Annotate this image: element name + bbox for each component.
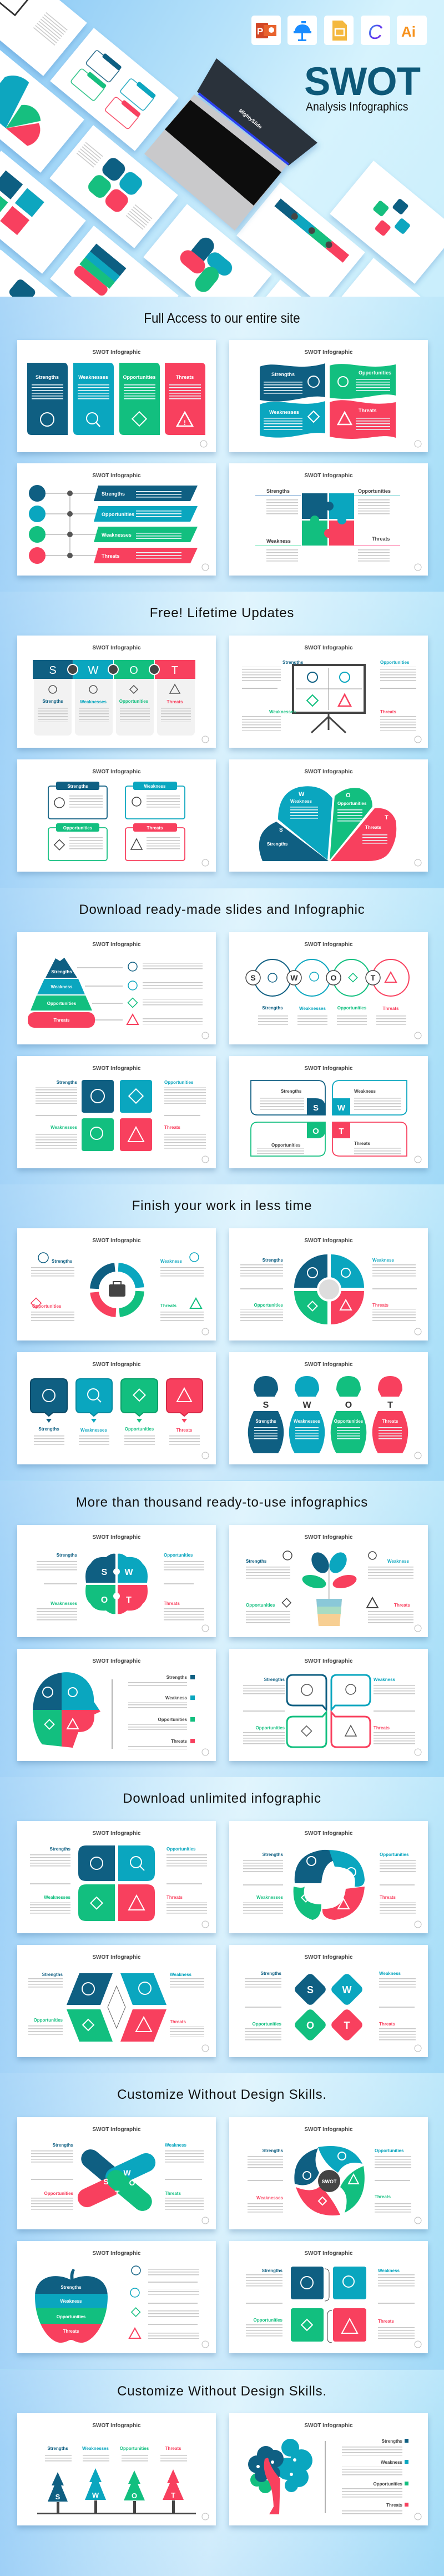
- ================= SECTION 5 =================: [0, 1481, 444, 1777]
- card 05: ribbon: Opportunities: [119, 699, 149, 704]
- card 16: vases: SWOT Infographic: [304, 1362, 353, 1368]
- card 27: apple: Strengths: [60, 2285, 82, 2290]
- card 09: pyramid: Threats: [54, 1018, 70, 1023]
- hero title: SWOT: [304, 60, 420, 104]
- card 02: wavy quadrants: SWOT Infographic: [304, 349, 353, 356]
- card 15: speech bubbles: [17, 1352, 216, 1464]
- card 08: fan: Strengths: [267, 842, 288, 847]
- card 08: fan: S: [279, 827, 283, 833]
- card 16: vases: Opportunities: [334, 1419, 364, 1424]
- card 23: hexagon: [17, 1945, 216, 2057]
- hero slide: easel: [0, 0, 87, 76]
- card 01: vertical panels: Opportunities: [123, 374, 155, 380]
- card 18: plant: Strengths: [246, 1559, 267, 1564]
- card 24: diamonds: O: [306, 2020, 314, 2031]
- card 07: outlined boxes: Opportunities: [63, 826, 93, 831]
- card 27: apple: Opportunities: [57, 2314, 86, 2319]
- card 17: brain puzzle: T: [126, 1595, 132, 1605]
- card 02: wavy quadrants: Threats: [359, 408, 377, 413]
- card 08: fan: Weakness: [290, 799, 312, 804]
- hero subtitle: Analysis Infographics: [306, 101, 408, 113]
- card 29: trees: Strengths: [47, 2446, 68, 2451]
- card 14: pie: Threats: [372, 1303, 389, 1308]
- card 20: outline bubbles: Opportunities: [256, 1725, 285, 1730]
- card 30: tree: Weakness: [381, 2460, 403, 2465]
- card 29: trees: O: [132, 2492, 137, 2500]
- card 09: pyramid: SWOT Infographic: [92, 942, 141, 948]
- card 25: knot: SWOT Infographic: [92, 2127, 141, 2133]
- card 25: knot: S: [103, 2177, 109, 2186]
- card 10: rings: W: [290, 973, 298, 982]
- card 04: puzzle: Opportunities: [358, 488, 391, 494]
- card 23: hexagon: Threats: [170, 2019, 186, 2024]
- card 11: squares: SWOT Infographic: [92, 1066, 141, 1072]
- card 01: vertical panels: !: [184, 419, 186, 427]
- card 05: ribbon: SWOT Infographic: [92, 645, 141, 651]
- card 25: knot: O: [129, 2178, 135, 2187]
- ================= SECTION 1 =================: [0, 297, 444, 593]
- card 20: outline bubbles: [229, 1649, 428, 1761]
- card 29: trees: Opportunities: [120, 2446, 149, 2451]
- card 10: rings: S: [250, 973, 256, 982]
- card 14: pie: Opportunities: [254, 1303, 284, 1308]
- card 09: pyramid: Opportunities: [47, 1001, 77, 1006]
- card 21: rounded squares: Opportunities: [167, 1847, 196, 1852]
- icon: powerpoint: P: [257, 26, 263, 37]
- card 20: outline bubbles: Threats: [374, 1725, 390, 1730]
- card 05: ribbon: Weaknesses: [80, 699, 107, 704]
- card 02: wavy quadrants: Opportunities: [359, 370, 391, 376]
- card 25: knot: Threats: [165, 2191, 181, 2196]
- card 28: framed squares: Threats: [378, 2319, 394, 2324]
- card 05: ribbon: T: [171, 664, 178, 677]
- card 24: diamonds: Opportunities: [253, 2022, 282, 2027]
- card 07: outlined boxes: Weakness: [144, 784, 166, 789]
- card 04: puzzle: [229, 463, 428, 576]
- card 19: head: Threats: [171, 1739, 188, 1744]
- section title: thousand infographics: More than thousand ready-to-use infographics: [76, 1495, 368, 1510]
- card 06: easel: Strengths: [282, 660, 304, 665]
- card 12: letter boxes: SWOT Infographic: [304, 1066, 353, 1072]
- card 07: outlined boxes: Threats: [147, 826, 163, 831]
- card 29: trees: S: [56, 2493, 60, 2501]
- card 14: pie: [229, 1228, 428, 1340]
- hero slide: W petals: [0, 49, 84, 173]
- card 23: hexagon: SWOT Infographic: [92, 1954, 141, 1960]
- ================= SECTION 7 =================: [0, 2073, 444, 2369]
- card 15: speech bubbles: Opportunities: [125, 1427, 154, 1432]
- card 06: easel: Threats: [380, 709, 396, 714]
- card 19: head: SWOT Infographic: [92, 1658, 141, 1664]
- hero slide: diamond quads: [0, 151, 86, 274]
- card 25: knot: Strengths: [53, 2143, 74, 2148]
- card 07: outlined boxes: [17, 759, 216, 872]
- card 27: apple: SWOT Infographic: [92, 2250, 141, 2257]
- hero slide: left bottom: [0, 249, 85, 373]
- hero banner: [0, 0, 444, 297]
- card 01: vertical panels: SWOT Infographic: [92, 349, 141, 356]
- ================= SECTION 8 =================: [0, 2370, 444, 2576]
- card 11: squares: [17, 1056, 216, 1168]
- card 25: knot: W: [123, 2168, 131, 2177]
- card 24: diamonds: T: [344, 2020, 350, 2031]
- card 24: diamonds: W: [342, 1984, 352, 1995]
- card 26: swirl swot: SWOT: [322, 2179, 337, 2184]
- card 10: rings: Strengths: [262, 1006, 283, 1011]
- section title: customize: Customize Without Design Skills.: [117, 2087, 327, 2102]
- card 12: letter boxes: W: [337, 1103, 346, 1113]
- card 16: vases: T: [387, 1400, 393, 1410]
- card 25: knot: [17, 2117, 216, 2229]
- card 08: fan: T: [385, 814, 389, 821]
- card 16: vases: S: [263, 1400, 269, 1410]
- card 04: puzzle: Strengths: [266, 488, 290, 494]
- hero slide: knot: [143, 204, 272, 327]
- ================= SECTION 3 =================: [0, 888, 444, 1184]
- card 24: diamonds: Weakness: [379, 1971, 401, 1976]
- card 06: easel: Weaknesses: [269, 709, 296, 714]
- icon: keynote: [287, 16, 317, 45]
- card 12: letter boxes: Strengths: [281, 1089, 302, 1094]
- card 10: rings: Threats: [383, 1006, 399, 1011]
- section title: finish work: Finish your work in less time: [132, 1198, 312, 1213]
- card 24: diamonds: [229, 1945, 428, 2057]
- card 18: plant: Threats: [394, 1603, 410, 1608]
- card 13: donut: Opportunities: [32, 1304, 62, 1309]
- card 03: timeline bars: [17, 463, 216, 576]
- card 12: letter boxes: [229, 1056, 428, 1168]
- card 21: rounded squares: Strengths: [50, 1847, 71, 1852]
- icon: google slides: [324, 16, 354, 45]
- card 10: rings: T: [371, 973, 376, 982]
- hero slide: bottom right: [330, 258, 444, 381]
- card 30: tree: Opportunities: [374, 2482, 403, 2487]
- card 03: timeline bars: Opportunities: [102, 512, 134, 517]
- card 16: vases: Weaknesses: [294, 1419, 320, 1424]
- card 25: knot: Opportunities: [44, 2191, 74, 2196]
- card 16: vases: Threats: [382, 1419, 398, 1424]
- card 17: brain puzzle: Weaknesses: [51, 1601, 78, 1606]
- card 05: ribbon: Strengths: [42, 699, 63, 704]
- section title: lifetime updates: Free! Lifetime Updates: [150, 606, 294, 621]
- card 21: rounded squares: Weaknesses: [44, 1895, 71, 1900]
- card 06: easel: Opportunities: [380, 660, 410, 665]
- card 11: squares: Strengths: [57, 1080, 78, 1085]
- card 10: rings: O: [331, 973, 337, 982]
- card 14: pie: SWOT Infographic: [304, 1238, 353, 1244]
- card 25: knot: Weakness: [165, 2143, 187, 2148]
- card 12: letter boxes: O: [312, 1127, 319, 1136]
- card 30: tree: Threats: [386, 2503, 403, 2508]
- card 12: letter boxes: T: [339, 1127, 344, 1136]
- card 19: head: [17, 1649, 216, 1761]
- card 20: outline bubbles: SWOT Infographic: [304, 1658, 353, 1664]
- card 24: diamonds: Strengths: [261, 1971, 282, 1976]
- app icons: [251, 16, 427, 45]
- card 17: brain puzzle: Opportunities: [164, 1553, 193, 1558]
- card 13: donut: SWOT Infographic: [92, 1238, 141, 1244]
- ================= SECTION 2 =================: [0, 592, 444, 888]
- card 13: donut: Weakness: [160, 1259, 183, 1264]
- card 08: fan: [229, 759, 428, 872]
- card 29: trees: [17, 2413, 216, 2525]
- card 24: diamonds: SWOT Infographic: [304, 1954, 353, 1960]
- card 17: brain puzzle: S: [102, 1568, 108, 1577]
- card 04: puzzle: Threats: [372, 536, 390, 542]
- card 07: outlined boxes: Strengths: [67, 784, 88, 789]
- card 09: pyramid: Weakness: [51, 984, 73, 989]
- card 07: outlined boxes: SWOT Infographic: [92, 769, 141, 775]
- ================= SECTION 6 =================: [0, 1777, 444, 2073]
- card 22: swirl: Opportunities: [380, 1852, 409, 1857]
- card 04: puzzle: SWOT Infographic: [304, 473, 353, 479]
- card 10: rings: Weaknesses: [299, 1006, 326, 1011]
- card 28: framed squares: Strengths: [262, 2268, 283, 2273]
- icon: illustrator: [397, 16, 427, 45]
- card 15: speech bubbles: SWOT Infographic: [92, 1362, 141, 1368]
- card 01: vertical panels: Weaknesses: [78, 374, 108, 380]
- hero slide: diamonds: [330, 161, 444, 284]
- card 16: vases: W: [302, 1400, 311, 1410]
- card 06: easel: [229, 636, 428, 748]
- card 22: swirl: Threats: [380, 1895, 396, 1900]
- card 05: ribbon: O: [129, 664, 138, 677]
- card 28: framed squares: Weakness: [378, 2268, 400, 2273]
- card 05: ribbon: Threats: [167, 699, 183, 704]
- card 20: outline bubbles: Weakness: [374, 1677, 396, 1682]
- card 08: fan: Threats: [365, 825, 381, 830]
- card 17: brain puzzle: Strengths: [57, 1553, 78, 1558]
- card 14: pie: Weakness: [372, 1258, 395, 1263]
- card 14: pie: Strengths: [263, 1258, 284, 1263]
- card 13: donut: Threats: [160, 1303, 176, 1308]
- card 12: letter boxes: Weakness: [354, 1089, 376, 1094]
- card 19: head: Opportunities: [158, 1717, 188, 1722]
- card 11: squares: Opportunities: [164, 1080, 194, 1085]
- laptop: [144, 58, 317, 231]
- card 21: rounded squares: [17, 1821, 216, 1933]
- card 02: wavy quadrants: Weaknesses: [269, 409, 299, 415]
- card 18: plant: Opportunities: [246, 1603, 275, 1608]
- card 26: swirl swot: Threats: [375, 2194, 391, 2199]
- hero slide: outlined boxes: [50, 28, 179, 151]
- card 30: tree: Strengths: [382, 2439, 403, 2444]
- card 08: fan: SWOT Infographic: [304, 769, 353, 775]
- card 03: timeline bars: Weaknesses: [102, 532, 132, 538]
- card 02: wavy quadrants: Strengths: [271, 372, 295, 377]
- card 29: trees: W: [92, 2491, 99, 2499]
- card 20: outline bubbles: Strengths: [264, 1677, 285, 1682]
- card 18: plant: [229, 1525, 428, 1637]
- card 22: swirl: SWOT Infographic: [304, 1830, 353, 1837]
- card 28: framed squares: [229, 2241, 428, 2353]
- card 08: fan: W: [299, 791, 305, 798]
- card 23: hexagon: Opportunities: [34, 2018, 63, 2023]
- card 26: swirl swot: Opportunities: [375, 2148, 404, 2153]
- card 12: letter boxes: Opportunities: [271, 1143, 301, 1148]
- card 05: ribbon: [17, 636, 216, 748]
- card 09: pyramid: [17, 932, 216, 1044]
- card 12: letter boxes: Threats: [354, 1141, 370, 1146]
- card 03: timeline bars: Threats: [102, 553, 120, 559]
- card 29: trees: SWOT Infographic: [92, 2423, 141, 2429]
- card 15: speech bubbles: Weaknesses: [80, 1428, 107, 1433]
- card 25: knot: T: [115, 2189, 120, 2198]
- card 03: timeline bars: Strengths: [102, 491, 125, 497]
- card 11: squares: Weaknesses: [51, 1125, 78, 1130]
- card 30: tree: SWOT Infographic: [304, 2423, 353, 2429]
- card 22: swirl: [229, 1821, 428, 1933]
- card 17: brain puzzle: [17, 1525, 216, 1637]
- card 05: ribbon: S: [49, 664, 57, 677]
- hero slide: apple: [50, 226, 179, 349]
- card 30: tree: [229, 2413, 428, 2525]
- section title: unlimited: Download unlimited infographic: [123, 1791, 321, 1806]
- card 28: framed squares: SWOT Infographic: [304, 2250, 353, 2257]
- card 26: swirl swot: Weaknesses: [256, 2195, 284, 2200]
- card 23: hexagon: Strengths: [42, 1972, 63, 1977]
- card 19: head: Strengths: [167, 1675, 188, 1680]
- card 28: framed squares: Opportunities: [254, 2318, 283, 2323]
- card 22: swirl: Strengths: [263, 1852, 284, 1857]
- card 26: swirl swot: SWOT Infographic: [304, 2127, 353, 2133]
- card 29: trees: Threats: [165, 2446, 181, 2451]
- card 17: brain puzzle: SWOT Infographic: [92, 1534, 141, 1540]
- card 11: squares: Threats: [164, 1125, 180, 1130]
- card 01: vertical panels: Strengths: [36, 374, 59, 380]
- card 21: rounded squares: SWOT Infographic: [92, 1830, 141, 1837]
- card 23: hexagon: Weakness: [170, 1972, 192, 1977]
- section title: full access: Full Access to our entire site: [144, 311, 300, 326]
- card 16: vases: [229, 1352, 428, 1464]
- card 13: donut: Strengths: [52, 1259, 73, 1264]
- card 04: puzzle: Weakness: [266, 538, 291, 544]
- card 24: diamonds: Threats: [379, 2022, 395, 2027]
- card 01: vertical panels: Threats: [176, 374, 194, 380]
- icon: canva: [361, 16, 390, 45]
- card 29: trees: T: [171, 2491, 175, 2499]
- card 03: timeline bars: SWOT Infographic: [92, 473, 141, 479]
- card 17: brain puzzle: Threats: [164, 1601, 180, 1606]
- card 16: vases: O: [345, 1400, 352, 1410]
- card 08: fan: O: [346, 792, 351, 799]
- card 10: rings: SWOT Infographic: [304, 942, 353, 948]
- card 27: apple: [17, 2241, 216, 2353]
- card 26: swirl swot: Strengths: [263, 2148, 284, 2153]
- card 22: swirl: Weaknesses: [256, 1895, 284, 1900]
- card 29: trees: Weaknesses: [82, 2446, 109, 2451]
- card 18: plant: SWOT Infographic: [304, 1534, 353, 1540]
- card 24: diamonds: S: [307, 1984, 314, 1995]
- section title: customize 2: Customize Without Design Skills.: [117, 2384, 327, 2399]
- card 10: rings: [229, 932, 428, 1044]
- card 13: donut: [17, 1228, 216, 1340]
- hero slide: ribbon: [236, 182, 365, 306]
- card 19: head: Weakness: [165, 1695, 188, 1700]
- card 01: vertical panels: [17, 340, 216, 452]
- icon: powerpoint: [251, 16, 281, 45]
- card 16: vases: Strengths: [255, 1419, 276, 1424]
- card 17: brain puzzle: W: [124, 1568, 133, 1577]
- card 18: plant: Weakness: [387, 1559, 410, 1564]
- card 05: ribbon: W: [88, 664, 99, 677]
- laptop: MightySlide: [238, 108, 263, 130]
- card 10: rings: Opportunities: [337, 1006, 367, 1011]
- card 08: fan: Opportunities: [337, 801, 367, 806]
- card 27: apple: Weakness: [60, 2299, 82, 2304]
- section title: download ready-made: Download ready-made slides and Infographic: [79, 902, 365, 917]
- ================= SECTION 4 =================: [0, 1184, 444, 1480]
- card 15: speech bubbles: Strengths: [38, 1427, 59, 1432]
- card 17: brain puzzle: O: [101, 1595, 108, 1605]
- hero slide: 4 petals: [49, 125, 178, 248]
- icon: canva: C: [368, 21, 383, 43]
- card 09: pyramid: Strengths: [51, 969, 72, 974]
- card 12: letter boxes: S: [313, 1103, 319, 1113]
- card 21: rounded squares: Threats: [167, 1895, 183, 1900]
- card 02: wavy quadrants: [229, 340, 428, 452]
- icon: illustrator: Ai: [401, 23, 416, 40]
- card 06: easel: SWOT Infographic: [304, 645, 353, 651]
- card 15: speech bubbles: Threats: [176, 1428, 193, 1433]
- card 26: swirl swot: [229, 2117, 428, 2229]
- card 27: apple: Threats: [63, 2329, 79, 2334]
